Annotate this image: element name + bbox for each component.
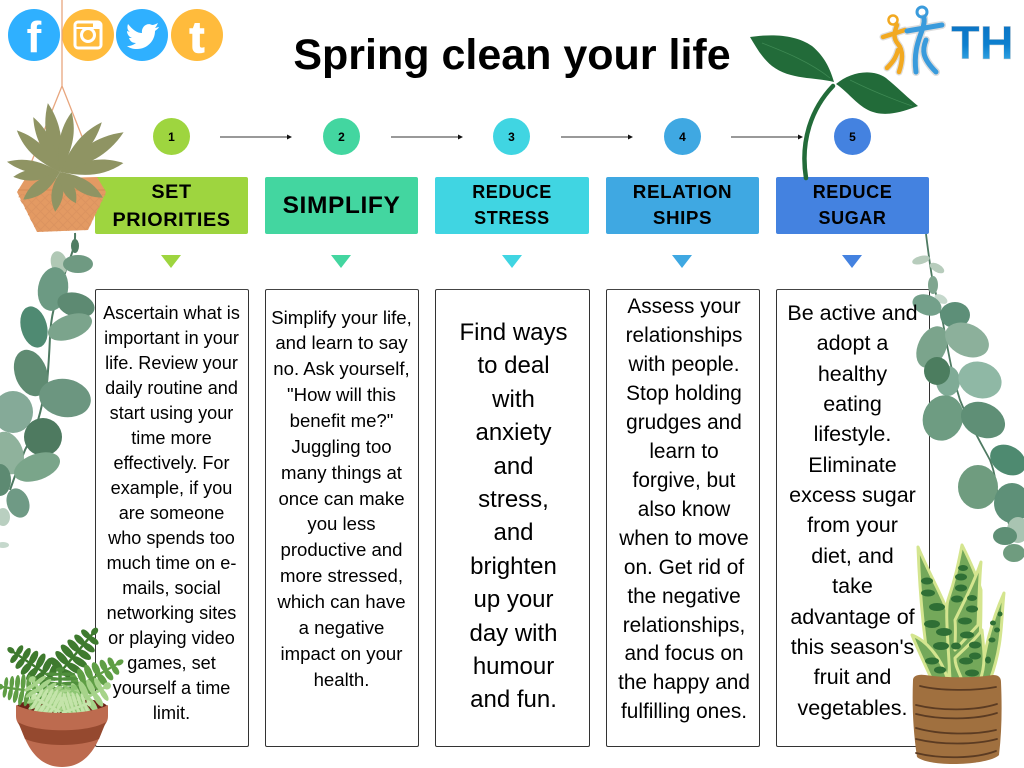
potted fern <box>0 616 132 767</box>
text: reduce sugar body: excess sugar <box>789 483 916 507</box>
heading bar: relationships <box>606 177 759 234</box>
text: reduce stress body: and <box>493 519 534 546</box>
text: reduce sugar body: fruit and <box>814 665 891 689</box>
step 2 number <box>323 118 360 155</box>
text: reduce stress body: anxiety <box>475 419 552 446</box>
text: set priorities body: much time on e- <box>107 552 236 572</box>
heading bar: set priorities: PRIORITIES <box>112 209 231 231</box>
text: reduce stress body: stress, <box>478 486 549 513</box>
text: relationships body: Assess your <box>627 295 741 318</box>
step 5 number <box>834 118 871 155</box>
step 2 number: 2 <box>338 130 345 144</box>
text: reduce stress body: brighten <box>470 553 557 580</box>
text: simplify body: productive and <box>280 539 402 560</box>
text: relationships body: and focus on <box>624 642 744 665</box>
title: Spring clean your life <box>293 31 731 79</box>
text: set priorities body: are someone <box>119 502 224 522</box>
text: simplify body: health. <box>314 669 369 690</box>
heading bar: reduce sugar: REDUCE <box>813 182 892 202</box>
step 3 number: 3 <box>508 130 515 144</box>
text: set priorities body: example, if you <box>111 478 232 498</box>
heading bar: relationships: RELATION <box>633 181 732 202</box>
heading bar: reduce stress <box>435 177 589 234</box>
text: relationships body <box>618 295 750 723</box>
text: reduce sugar body: diet, and <box>811 544 894 568</box>
text: relationships body: learn to <box>649 440 719 463</box>
panel: relationships box <box>606 289 760 747</box>
hanging plant in basket <box>6 0 128 232</box>
text: set priorities body: limit. <box>153 702 190 722</box>
heading bar: reduce stress: REDUCE <box>472 182 552 202</box>
heading bar: reduce sugar <box>776 177 929 234</box>
text: reduce sugar body: adopt a <box>817 331 888 355</box>
heading bar: simplify <box>265 177 418 234</box>
text: set priorities body: Ascertain what is <box>103 302 240 322</box>
arrow 4 to 5 <box>731 134 803 140</box>
text: set priorities body: yourself a time <box>113 678 230 698</box>
social icon: facebook <box>8 9 60 62</box>
heading bar: set priorities <box>95 177 248 234</box>
logo: TH: TH <box>951 16 1014 69</box>
text: simplify body: a negative <box>299 617 384 638</box>
text: simplify body: once can make <box>278 488 405 509</box>
text: reduce sugar body: advantage of <box>790 605 915 629</box>
pointer triangle 5 <box>842 255 862 268</box>
step 1 number <box>153 118 190 155</box>
text: relationships body: forgive, but <box>633 469 735 492</box>
text: set priorities body: effectively. For <box>114 452 229 472</box>
text: simplify body: many things at <box>281 462 402 483</box>
text: set priorities body: start using your <box>110 402 233 422</box>
text: relationships body: relationships <box>626 324 742 347</box>
text: reduce sugar body: eating <box>823 392 882 416</box>
pointer triangle 4 <box>672 255 692 268</box>
step 5 number: 5 <box>849 130 856 144</box>
text: reduce stress body: and <box>493 453 534 480</box>
text: reduce sugar body <box>787 301 918 720</box>
text: simplify body: you less <box>307 513 376 534</box>
panel: reduce sugar box <box>776 289 930 747</box>
text: reduce sugar body: vegetables. <box>798 696 907 720</box>
text: reduce sugar body: lifestyle. <box>814 422 891 446</box>
text: set priorities body: who spends too <box>108 528 235 548</box>
text: set priorities body: life. Review your <box>105 352 238 372</box>
pointer triangle 2 <box>331 255 351 268</box>
social icon: tumblr: t <box>190 13 205 62</box>
text: relationships body: the negative <box>627 585 741 608</box>
text: relationships body: with people. <box>628 353 740 376</box>
pointer triangle 1 <box>161 255 181 268</box>
social icon: instagram <box>62 9 114 61</box>
text: relationships body: also know <box>638 498 730 521</box>
heading bar: set priorities: SET <box>151 181 192 203</box>
text: simplify body: Juggling too <box>291 436 392 457</box>
text: reduce sugar body: from your <box>807 513 898 537</box>
text: reduce sugar body: take <box>832 574 873 598</box>
text: set priorities body: mails, social <box>122 578 221 598</box>
text: set priorities body: time more <box>131 428 212 448</box>
arrow 1 to 2 <box>220 134 292 140</box>
text: set priorities body: games, set <box>127 652 216 672</box>
panel: simplify box <box>265 289 419 747</box>
logo: TH <box>880 6 1014 76</box>
text: reduce stress body: and fun. <box>470 686 557 713</box>
heading bar: simplify: SIMPLIFY <box>283 192 400 218</box>
arrow 3 to 4 <box>561 134 633 140</box>
sprout with two leaves <box>750 35 918 178</box>
left eucalyptus vine <box>0 233 97 548</box>
text: simplify body: impact on your <box>281 643 402 664</box>
social icon: tumblr <box>171 9 223 62</box>
text: simplify body <box>271 306 412 690</box>
text: relationships body: on. Get rid of <box>624 556 744 579</box>
text: simplify body: no. Ask yourself, <box>273 358 410 379</box>
text: reduce stress body <box>459 319 568 713</box>
step 3 number <box>493 118 530 155</box>
text: simplify body: which can have <box>277 591 406 612</box>
text: reduce sugar body: Eliminate <box>808 453 897 477</box>
right eucalyptus vine <box>909 234 1024 562</box>
text: simplify body: "How will this <box>287 384 396 405</box>
step 4 number: 4 <box>679 130 686 144</box>
text: relationships body: relationships, <box>623 614 745 636</box>
text: reduce stress body: to deal <box>477 352 550 379</box>
heading bar: relationships: SHIPS <box>653 207 712 228</box>
panel: reduce stress box <box>435 289 590 747</box>
text: reduce sugar body: this season's <box>791 635 914 659</box>
arrow 2 to 3 <box>391 134 463 140</box>
text: relationships body: when to move <box>619 527 749 550</box>
text: simplify body: benefit me?" <box>290 410 393 431</box>
text: reduce stress body: Find ways <box>459 319 568 346</box>
heading bar: reduce stress: STRESS <box>474 208 550 228</box>
text: simplify body: more stressed, <box>280 565 403 586</box>
text: set priorities body: or playing video <box>108 628 235 648</box>
text: reduce stress body: with <box>492 386 535 413</box>
pointer triangle 3 <box>502 255 522 268</box>
text: simplify body: and learn to say <box>275 332 408 353</box>
text: reduce sugar body: Be active and <box>787 301 918 325</box>
step 1 number: 1 <box>168 130 175 144</box>
step 4 number <box>664 118 701 155</box>
text: set priorities body: important in your <box>104 328 239 348</box>
text: reduce stress body: up your <box>473 586 554 613</box>
panel: set priorities box <box>95 289 249 747</box>
social icon: facebook: f <box>27 13 42 62</box>
text: relationships body: Stop holding <box>626 382 742 405</box>
text: set priorities body: daily routine and <box>105 378 238 398</box>
text: relationships body: grudges and <box>626 411 742 434</box>
text: reduce stress body: day with <box>469 620 558 647</box>
potted snake plant <box>912 545 1004 764</box>
text: set priorities body <box>103 302 240 722</box>
heading bar: reduce sugar: SUGAR <box>818 208 886 228</box>
text: reduce stress body: humour <box>473 653 554 680</box>
text: relationships body: fulfilling ones. <box>621 700 747 723</box>
social icon: twitter <box>116 9 168 61</box>
text: relationships body: the happy and <box>618 671 750 694</box>
text: simplify body: Simplify your life, <box>271 306 412 328</box>
text: reduce sugar body: healthy <box>818 362 887 386</box>
text: set priorities body: networking sites <box>107 602 236 622</box>
